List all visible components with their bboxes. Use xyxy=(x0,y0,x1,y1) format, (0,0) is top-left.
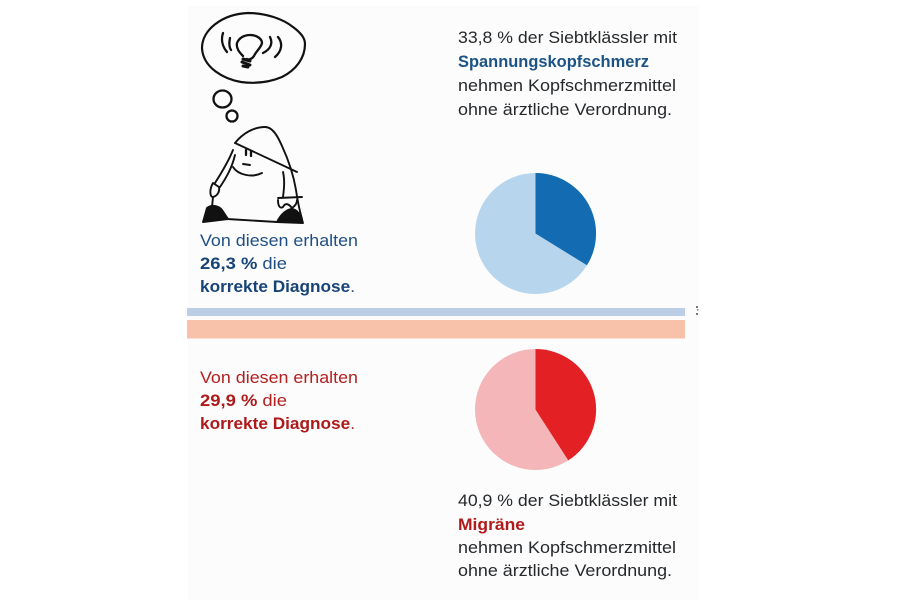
text block: diagnosis tension headache xyxy=(200,232,358,296)
text block: diagnosis migraine: Von diesen erhalten xyxy=(200,369,358,387)
icon: light bulb xyxy=(222,33,281,67)
highlighted term: Migräne: Migräne xyxy=(458,516,525,534)
text block: bottom statement: ohne ärztliche Verordnung. xyxy=(458,562,672,580)
icon: thought bubble xyxy=(202,13,305,83)
text block: diagnosis migraine xyxy=(200,369,358,433)
text block: diagnosis tension headache: korrekte Diagnose . xyxy=(200,278,355,296)
divider: blue band xyxy=(187,308,685,316)
text block: bottom statement: 40,9 % der Siebtklässler mit xyxy=(458,492,677,510)
text block: bottom statement xyxy=(458,492,677,580)
icon: figure xyxy=(203,127,303,223)
icon: small thought circles xyxy=(214,90,238,122)
pie chart: 33,8 % Spannungskopfschmerz xyxy=(475,173,596,294)
text block: diagnosis migraine: korrekte Diagnose . xyxy=(200,415,355,433)
illustration: thinking figure with light bulb xyxy=(202,13,305,223)
text block: diagnosis tension headache: Von diesen erhalten xyxy=(200,232,358,250)
small mark right of divider xyxy=(696,306,698,315)
text block: top statement xyxy=(458,29,677,119)
text block: top statement: ohne ärztliche Verordnung. xyxy=(458,101,672,119)
text block: diagnosis tension headache: 26,3 % die xyxy=(200,255,287,273)
text block: top statement: 33,8 % der Siebtklässler mit xyxy=(458,29,677,47)
pie chart: 40,9 % Migräne xyxy=(475,349,596,470)
text block: bottom statement: nehmen Kopfschmerzmittel xyxy=(458,539,676,557)
text block: diagnosis migraine: 29,9 % die xyxy=(200,392,287,410)
text block: top statement: nehmen Kopfschmerzmittel xyxy=(458,77,676,95)
divider: orange band xyxy=(187,320,685,338)
highlighted term: Spannungskopfschmerz: Spannungskopfschmerz xyxy=(458,53,649,71)
